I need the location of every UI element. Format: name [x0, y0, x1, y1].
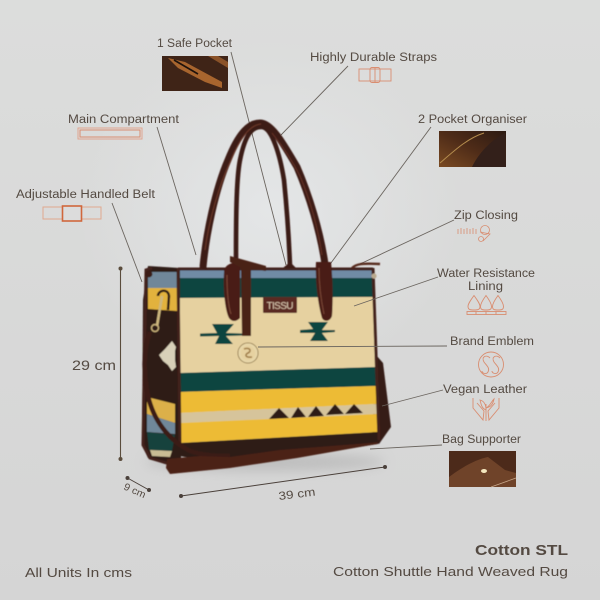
label: Brand Emblem: Brand Emblem — [450, 336, 534, 348]
product subtitle: Cotton Shuttle Hand Weaved Rug — [333, 564, 568, 579]
label: Zip Closing: Zip Closing — [454, 210, 518, 222]
label: Vegan Leather: Vegan Leather — [443, 384, 527, 396]
dimension: depth — [126, 476, 151, 492]
label: 2 Pocket Organiser: 2 Pocket Organiser — [418, 114, 527, 126]
label: 1 Safe Pocket: 1 Safe Pocket — [157, 38, 233, 50]
icon: strap — [359, 68, 391, 82]
label: Bag Supporter: Bag Supporter — [442, 434, 521, 446]
right gusset — [372, 355, 391, 444]
icon: main compartment — [78, 128, 142, 139]
icon: belt buckle — [43, 206, 101, 221]
tribal motif right — [300, 322, 335, 341]
tribal motif left — [200, 324, 243, 344]
side flower motif — [159, 341, 176, 371]
handle tabs — [224, 262, 240, 321]
triangle row — [269, 404, 363, 419]
brand label — [263, 297, 297, 313]
shoulder strap — [166, 442, 378, 474]
icon: water drops — [467, 296, 506, 314]
label: Main Compartment: Main Compartment — [68, 114, 180, 126]
side strap and clip — [145, 332, 230, 456]
label: 29 cm: 29 cm — [72, 357, 116, 373]
icon: hands and leaf — [473, 398, 499, 421]
bag piping — [143, 268, 379, 464]
label: 9 cm: 9 cm — [122, 482, 147, 501]
label: Water Resistance Lining: Water Resistance — [437, 268, 535, 280]
front handle — [203, 123, 325, 267]
zip tab — [352, 264, 380, 268]
dimension: width — [179, 465, 387, 498]
charm strap — [230, 256, 266, 336]
label: 39 cm: 39 cm — [278, 487, 316, 503]
callout lines over bag — [258, 277, 447, 406]
label: Adjustable Handled Belt: Adjustable Handled Belt — [16, 189, 156, 201]
thumbnail: safe pocket — [162, 56, 228, 91]
dimension: height — [118, 266, 122, 461]
side gusset — [142, 266, 181, 464]
label: Water Resistance Lining: Lining — [468, 281, 503, 293]
brand label: TISSU — [266, 301, 294, 312]
icon: emblem — [478, 352, 504, 377]
front panel rug — [180, 270, 373, 278]
label: Highly Durable Straps: Highly Durable Straps — [310, 52, 437, 64]
label: Water Resistance Lining — [437, 268, 535, 293]
charm — [238, 343, 258, 363]
icon: zip — [458, 226, 490, 242]
thumbnail: pocket organiser — [439, 131, 506, 167]
side gusset stripes — [148, 272, 177, 288]
callout lines behind bag — [112, 52, 454, 449]
thumbnail: bag supporter — [449, 451, 516, 487]
note: units: All Units In cms — [25, 565, 133, 580]
bag illustration — [142, 123, 391, 474]
product title: Cotton STL — [475, 542, 568, 559]
rear handle — [236, 127, 290, 266]
